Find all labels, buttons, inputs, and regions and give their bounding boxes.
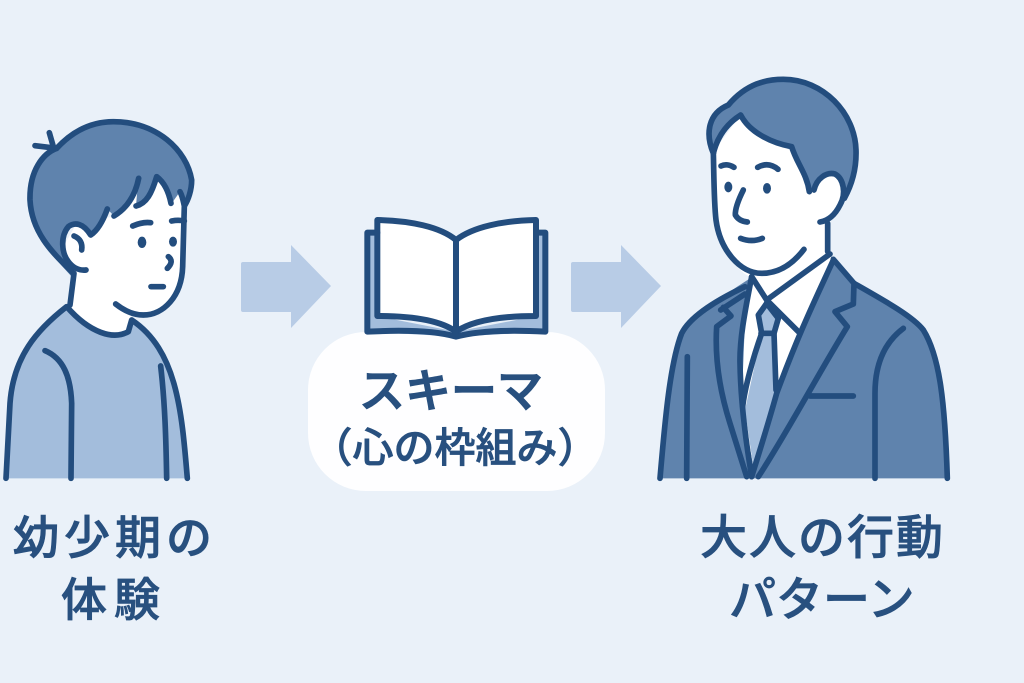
text: adult behavior patterns: 大人の行動 [700, 511, 945, 564]
text: childhood experience: 幼少期の [13, 512, 217, 564]
icon: boy, childhood [6, 122, 192, 478]
arrow: schema to adult [571, 245, 661, 328]
icon: open book [366, 220, 546, 337]
panel: schema label [308, 332, 605, 491]
text: mental framework: （心の枠組み） [312, 425, 598, 471]
text: schema: スキーマ [359, 365, 543, 417]
text: childhood experience: 体験 [61, 574, 167, 626]
text: adult behavior patterns: パターン [729, 573, 915, 626]
icon: adult man in suit [660, 79, 947, 478]
arrow: childhood to schema [241, 245, 331, 328]
